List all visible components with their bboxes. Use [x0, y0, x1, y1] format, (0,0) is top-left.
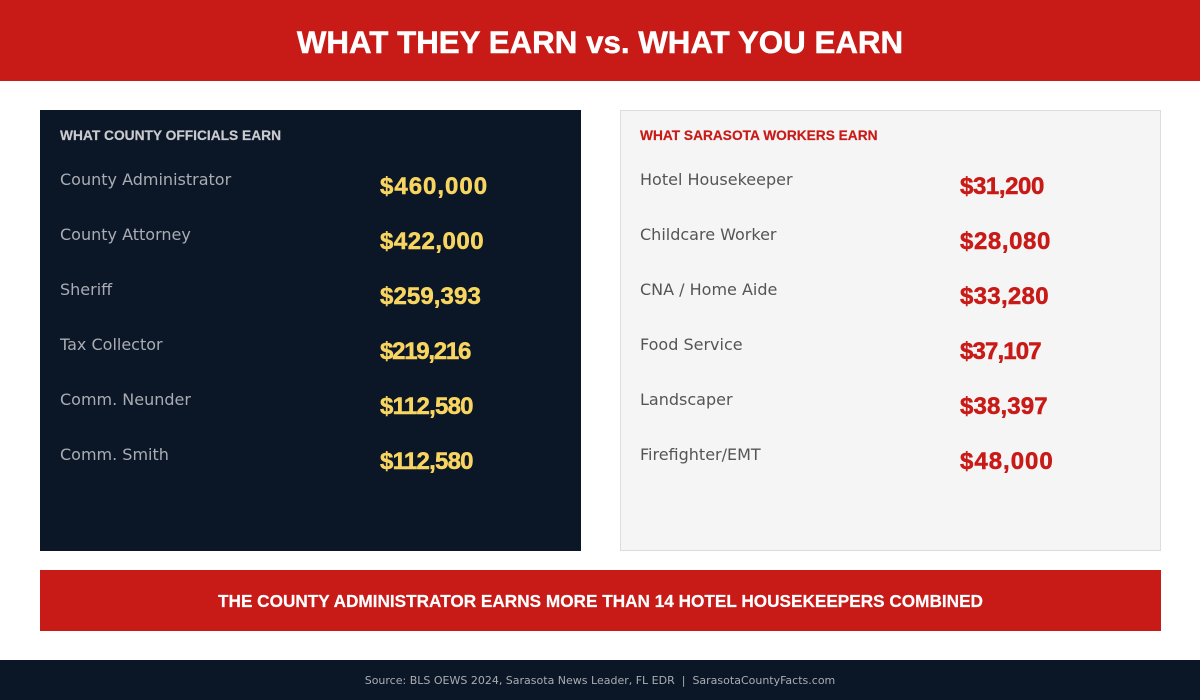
- panel: county officials: [40, 110, 581, 551]
- row: Firefighter/EMT: $48,000: [960, 448, 1054, 475]
- row: County Administrator: [60, 170, 488, 200]
- row: Sheriff: Sheriff: [60, 280, 112, 299]
- row: Childcare Worker: $28,080: [960, 228, 1051, 255]
- source line: Source: BLS OEWS 2024, Sarasota News Leader, FL EDR | SarasotaCountyFacts.com: [365, 674, 835, 687]
- row: Comm. Neunder: Comm. Neunder: [60, 390, 191, 409]
- row: County Attorney: $422,000: [380, 228, 484, 255]
- callout text: THE COUNTY ADMINISTRATOR EARNS MORE THAN 14 HOTEL HOUSEKEEPERS COMBINED: [218, 591, 983, 611]
- row: Childcare Worker: [640, 225, 1051, 255]
- row: Comm. Smith: [60, 445, 473, 475]
- panel: Sarasota workers: [620, 110, 1161, 551]
- panel heading: Sarasota workers: WHAT SARASOTA WORKERS EARN: [640, 128, 878, 143]
- row: Tax Collector: $219,216: [380, 338, 470, 365]
- row: Hotel Housekeeper: $31,200: [960, 173, 1044, 200]
- row: County Attorney: [60, 225, 484, 255]
- row: Firefighter/EMT: Firefighter/EMT: [640, 445, 761, 464]
- header banner: [0, 0, 1200, 81]
- row: Sheriff: [60, 280, 481, 310]
- row: Food Service: Food Service: [640, 335, 743, 354]
- row: Hotel Housekeeper: Hotel Housekeeper: [640, 170, 793, 189]
- row: Food Service: [640, 335, 1041, 365]
- footer bar: [0, 660, 1200, 700]
- row: Tax Collector: [60, 335, 471, 365]
- row: Childcare Worker: Childcare Worker: [640, 225, 776, 244]
- row: Comm. Neunder: $112,580: [380, 393, 473, 420]
- row: Firefighter/EMT: [640, 445, 1054, 475]
- row: Landscaper: Landscaper: [640, 390, 733, 409]
- row: County Administrator: $460,000: [380, 173, 488, 200]
- row: County Administrator: County Administrator: [60, 170, 231, 189]
- row: Landscaper: $38,397: [960, 393, 1048, 420]
- panel heading: county officials: WHAT COUNTY OFFICIALS EARN: [60, 128, 281, 143]
- row: Hotel Housekeeper: [640, 170, 1044, 200]
- row: Landscaper: [640, 390, 1048, 420]
- row: CNA / Home Aide: $33,280: [960, 283, 1049, 310]
- row: County Attorney: County Attorney: [60, 225, 191, 244]
- row: Sheriff: $259,393: [380, 283, 481, 310]
- row: Comm. Neunder: [60, 390, 473, 420]
- row: Tax Collector: Tax Collector: [60, 335, 163, 354]
- row: CNA / Home Aide: [640, 280, 1049, 310]
- title: WHAT THEY EARN vs. WHAT YOU EARN: [297, 25, 903, 60]
- callout banner: [40, 570, 1161, 631]
- row: CNA / Home Aide: CNA / Home Aide: [640, 280, 777, 299]
- row: Comm. Smith: $112,580: [380, 448, 473, 475]
- row: Comm. Smith: Comm. Smith: [60, 445, 169, 464]
- row: Food Service: $37,107: [960, 338, 1041, 365]
